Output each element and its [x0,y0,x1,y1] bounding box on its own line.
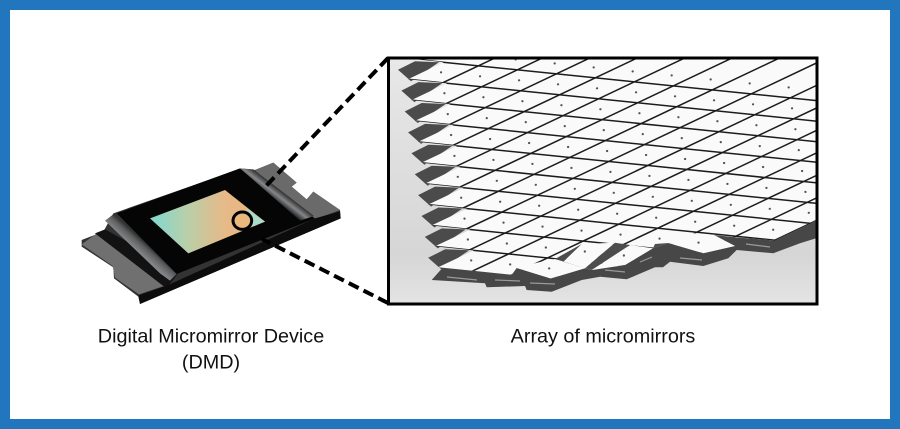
hole between tilted mirrors A [555,244,582,268]
chip side silhouette [82,163,341,304]
label: device: Digital Micromirror Device [98,326,324,348]
tilted mirror row 7 [668,232,735,253]
mirror surface [408,60,816,278]
diagonal lines [440,60,816,278]
left trench [95,229,180,286]
dark substructure [432,221,816,292]
substructure highlights [447,244,770,284]
hole between tilted mirrors C [653,243,668,248]
right roller [240,168,314,221]
upper dashed line [266,58,388,186]
row lines [408,60,816,266]
tilted mirror row 8 left [563,243,615,268]
black top face [117,168,315,274]
front edge [138,211,341,304]
panel: micromirror array [390,60,816,302]
mirror centre dots [440,60,810,270]
hole between tilted mirrors B [585,243,630,270]
tilted mirror row 9 [517,259,585,278]
lower dashed line [262,239,388,303]
icon: DMD chip [82,163,341,304]
tilted mirror row 8 right [592,245,653,270]
label: DMD: (DMD) [182,352,240,374]
mirror field [408,60,816,278]
panel background [388,58,818,305]
screen corner [247,208,265,227]
left roller [105,214,180,281]
zoom callout: dashed lines [262,58,388,303]
panel border [388,58,817,304]
mirror screen [150,190,265,253]
right leg [255,163,340,219]
label: array: Array of micromirrors [511,326,695,348]
zoom circle [233,212,252,229]
left leg [82,233,167,294]
dark hinge tips [398,61,469,269]
